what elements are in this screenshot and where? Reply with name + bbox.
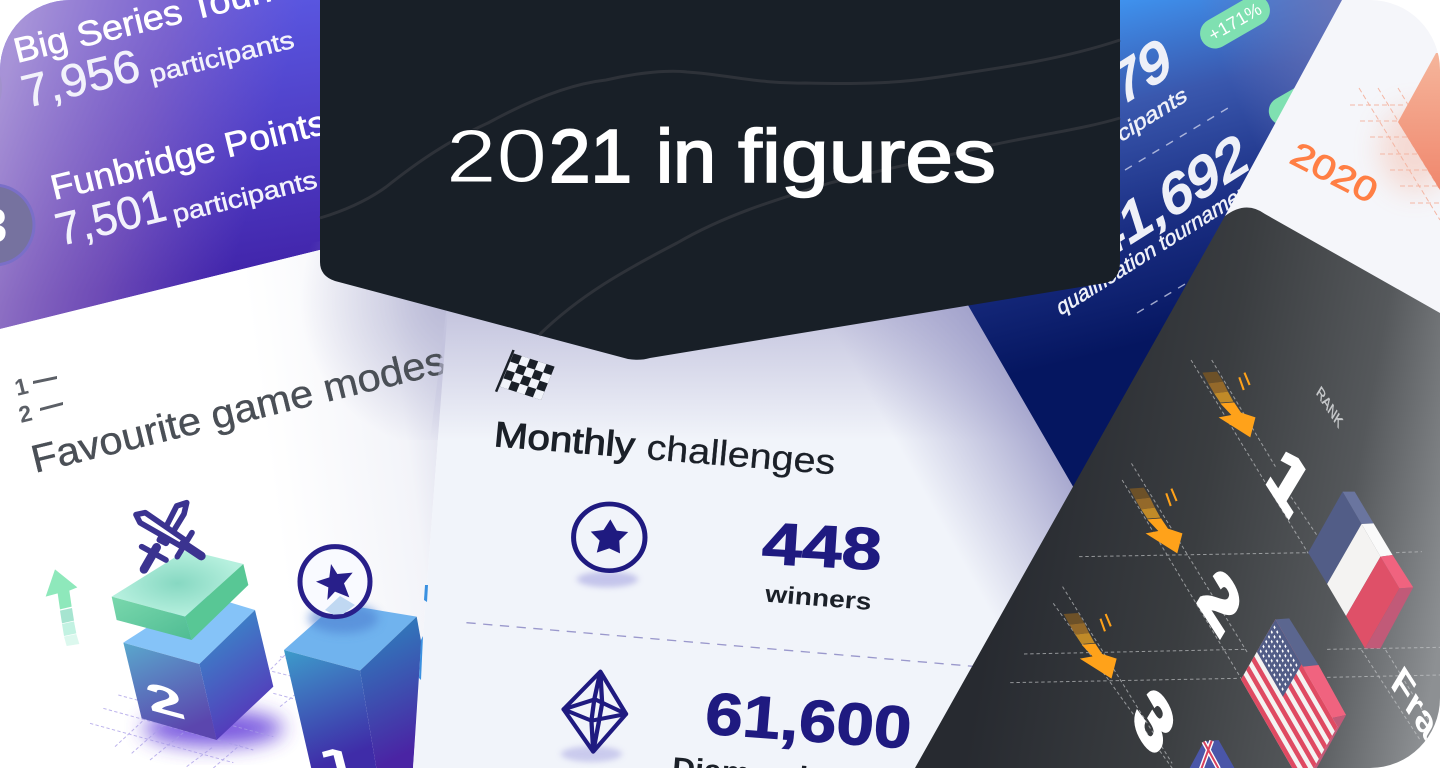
purple glow under podium <box>143 710 283 747</box>
flag: USA <box>1241 618 1346 768</box>
panel: favourite game modes <box>0 215 455 768</box>
heading: monthly challenges: challenges <box>645 427 837 482</box>
icon: up arrow <box>46 569 79 646</box>
stat: 41,692 qualification tournaments: qualification tournaments <box>1054 168 1266 321</box>
rank numbers <box>1123 431 1319 768</box>
green slab <box>112 550 248 640</box>
arrow: rank 3 <box>1064 613 1117 679</box>
arrow: rank 2 <box>1129 488 1182 553</box>
title: 21 <box>549 114 632 198</box>
icon: rank badge 3 <box>0 185 34 265</box>
icon: star badge <box>574 504 645 587</box>
stat: 41,692 qualification tournaments: 41,692 <box>1086 121 1254 274</box>
arrow: rank 1 <box>1202 372 1255 437</box>
stat: 448 winners <box>762 523 880 610</box>
panel: monthly challenges <box>413 280 1075 768</box>
icon: ranked list: 1 <box>12 372 31 401</box>
stat: 61,600 diamonds <box>674 693 910 768</box>
panel: tournaments and qualification <box>965 0 1345 490</box>
title: figures <box>738 114 996 198</box>
bar: orange block <box>1398 53 1440 190</box>
badge: partial green <box>1268 88 1294 123</box>
text: 7,956 participants <box>20 35 294 107</box>
badge: +171%: +171% <box>1205 0 1265 45</box>
table guide lines <box>1010 360 1440 768</box>
flag: France <box>1308 492 1413 648</box>
stat: participants count <box>1120 40 1187 140</box>
text: 7,501 participants: participants <box>170 166 320 229</box>
divider <box>1136 284 1186 314</box>
text: 7,501 participants: 7,501 <box>50 179 171 256</box>
bars peeking from the neighbouring panel <box>419 585 428 680</box>
icon: crossed swords <box>136 503 201 569</box>
icon: ranked list: 2 <box>16 400 35 428</box>
icon: first place star <box>300 547 370 617</box>
decorative curves <box>320 40 1120 335</box>
heading: monthly challenges <box>492 414 837 482</box>
heading: favourite game modes: Favourite game modes <box>27 339 450 482</box>
title <box>446 114 996 198</box>
title: 20 <box>446 114 547 198</box>
icon: diamond <box>561 672 626 762</box>
stat: 61,600 diamonds: 61,600 <box>703 680 914 762</box>
label: rank: RANK <box>1314 382 1346 432</box>
icon: checkered flag <box>496 350 555 400</box>
text: 7,956 participants: 7,956 <box>16 39 145 118</box>
rank numbers: 1 <box>1258 431 1319 531</box>
podium floor grid <box>90 654 296 768</box>
divider <box>1125 108 1228 170</box>
bar: second place <box>123 593 273 740</box>
rank numbers: 2 <box>1189 552 1251 652</box>
bar: first place <box>284 603 423 768</box>
title: in <box>656 114 716 198</box>
text: funbridge points: Funbridge Points Tour <box>47 83 411 208</box>
text: 7,501 participants <box>54 175 318 246</box>
stat: 448 winners: 448 <box>760 510 884 583</box>
panel: 2020 comparison <box>1225 0 1440 312</box>
flag: UK <box>1189 740 1235 768</box>
stat: 448 winners: winners <box>763 580 873 616</box>
header banner <box>320 0 1120 360</box>
bar: orange grid <box>1350 88 1440 220</box>
icon: ranked list <box>15 376 63 423</box>
text: 7,956 participants: participants <box>147 26 297 89</box>
label: 2020: 2020 <box>1284 135 1384 211</box>
icon: rank badge 2 <box>0 77 2 99</box>
panel: country rank <box>915 207 1440 768</box>
divider <box>466 623 977 667</box>
bar: second place: 2 <box>140 673 190 730</box>
stat: participants count: participants <box>1073 81 1189 173</box>
panel: tournament participants <box>0 0 320 329</box>
chart: isometric podium <box>46 503 423 768</box>
heading: monthly challenges: Monthly <box>492 414 637 465</box>
stat: participants count: 1,179 <box>1037 25 1178 160</box>
